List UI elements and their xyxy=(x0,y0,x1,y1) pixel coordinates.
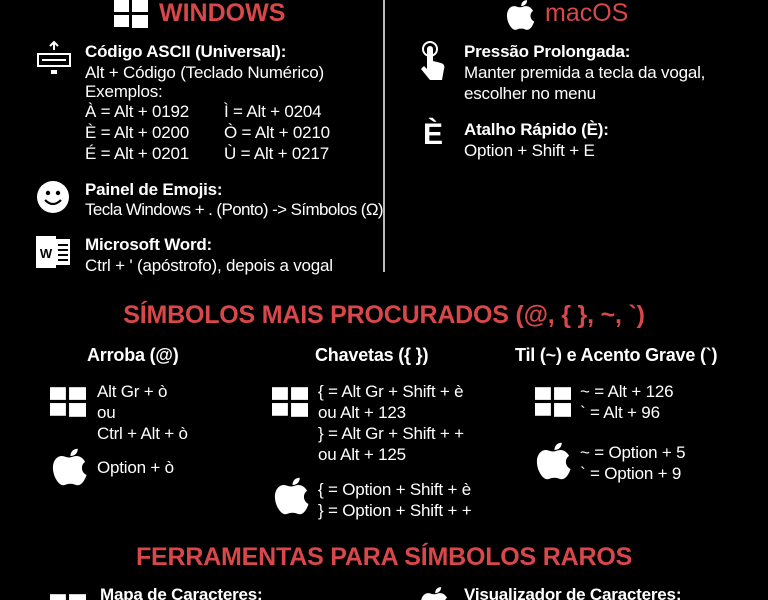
column: til: ` = Alt + 96 xyxy=(580,403,660,422)
item: ASCII: À = Alt + 0192 xyxy=(85,102,189,121)
icon: windows logo header xyxy=(114,0,148,28)
icon: word xyxy=(36,236,70,268)
item: ASCII: É = Alt + 0201 xyxy=(85,144,189,163)
item: word xyxy=(36,235,333,275)
icon: smiley xyxy=(37,181,69,213)
icon: windows xyxy=(50,387,86,417)
item: ASCII: Ì = Alt + 0204 xyxy=(224,102,321,121)
item: ASCII: Ò = Alt + 0210 xyxy=(224,123,330,142)
item: word: Ctrl + ' (apóstrofo), depois a vogal xyxy=(85,256,333,275)
title: symbols: SÍMBOLOS MAIS PROCURADOS (@, { }, ~, `) xyxy=(123,301,645,329)
column: arroba: Alt Gr + ò xyxy=(97,382,167,401)
icon: apple xyxy=(52,448,86,486)
item: shortcut: Atalho Rápido (È): xyxy=(464,120,609,139)
item: long press xyxy=(421,41,705,103)
icon: apple xyxy=(274,478,308,514)
column: til: ~ = Option + 5 xyxy=(580,443,685,462)
item: long press: Manter premida a tecla da vogal, xyxy=(464,63,705,82)
icon: touch hand xyxy=(421,41,444,80)
column: chavetas: } = Alt Gr + Shift + + xyxy=(318,424,464,443)
item: ASCII xyxy=(37,40,330,163)
item: long press: escolher no menu xyxy=(464,84,596,103)
column: chavetas: } = Option + Shift + + xyxy=(318,501,471,520)
column: til: ` = Option + 9 xyxy=(580,464,681,483)
column: arroba: Option + ò xyxy=(97,458,174,477)
title: tools: FERRAMENTAS PARA SÍMBOLOS RAROS xyxy=(136,543,632,571)
column: arroba: ou xyxy=(97,403,116,422)
item: shortcut xyxy=(423,118,609,160)
column: til: ~ = Alt + 126 xyxy=(580,382,673,401)
divider xyxy=(383,0,385,272)
icon: keyboard xyxy=(37,40,71,74)
item: ASCII: Alt + Código (Teclado Numérico) xyxy=(85,63,324,82)
icon: E grave: È xyxy=(423,118,443,151)
column: chavetas: ou Alt + 125 xyxy=(318,445,406,464)
icon: windows xyxy=(272,387,308,417)
item: ASCII: È = Alt + 0200 xyxy=(85,123,189,142)
column: chavetas: { = Alt Gr + Shift + è xyxy=(318,382,463,401)
icon: word: W xyxy=(40,246,53,261)
icon: apple xyxy=(536,442,570,480)
item: word: Microsoft Word: xyxy=(85,235,212,254)
item: ASCII: Código ASCII (Universal): xyxy=(85,42,286,61)
item: emojis xyxy=(37,180,383,219)
column: arroba xyxy=(50,345,188,486)
item: ASCII: Ù = Alt + 0217 xyxy=(224,144,329,163)
column: arroba: Ctrl + Alt + ò xyxy=(97,424,188,443)
item: shortcut: Option + Shift + E xyxy=(464,141,595,160)
item: long press: Pressão Prolongada: xyxy=(464,42,630,61)
item: ASCII: Exemplos: xyxy=(85,82,163,101)
item: emojis: Painel de Emojis: xyxy=(85,180,222,199)
column: chavetas xyxy=(272,345,471,520)
icon: apple header xyxy=(506,0,534,30)
column: til xyxy=(515,345,717,483)
column: arroba: Arroba (@) xyxy=(87,345,179,365)
icon: windows xyxy=(535,387,571,417)
item: emojis: Tecla Windows + . (Ponto) -> Símbolos (Ω) xyxy=(85,200,383,219)
column: chavetas: Chavetas ({ }) xyxy=(315,345,428,365)
column: chavetas: ou Alt + 123 xyxy=(318,403,406,422)
column: chavetas: { = Option + Shift + è xyxy=(318,480,471,499)
column: til: Til (~) e Acento Grave (`) xyxy=(515,345,717,365)
